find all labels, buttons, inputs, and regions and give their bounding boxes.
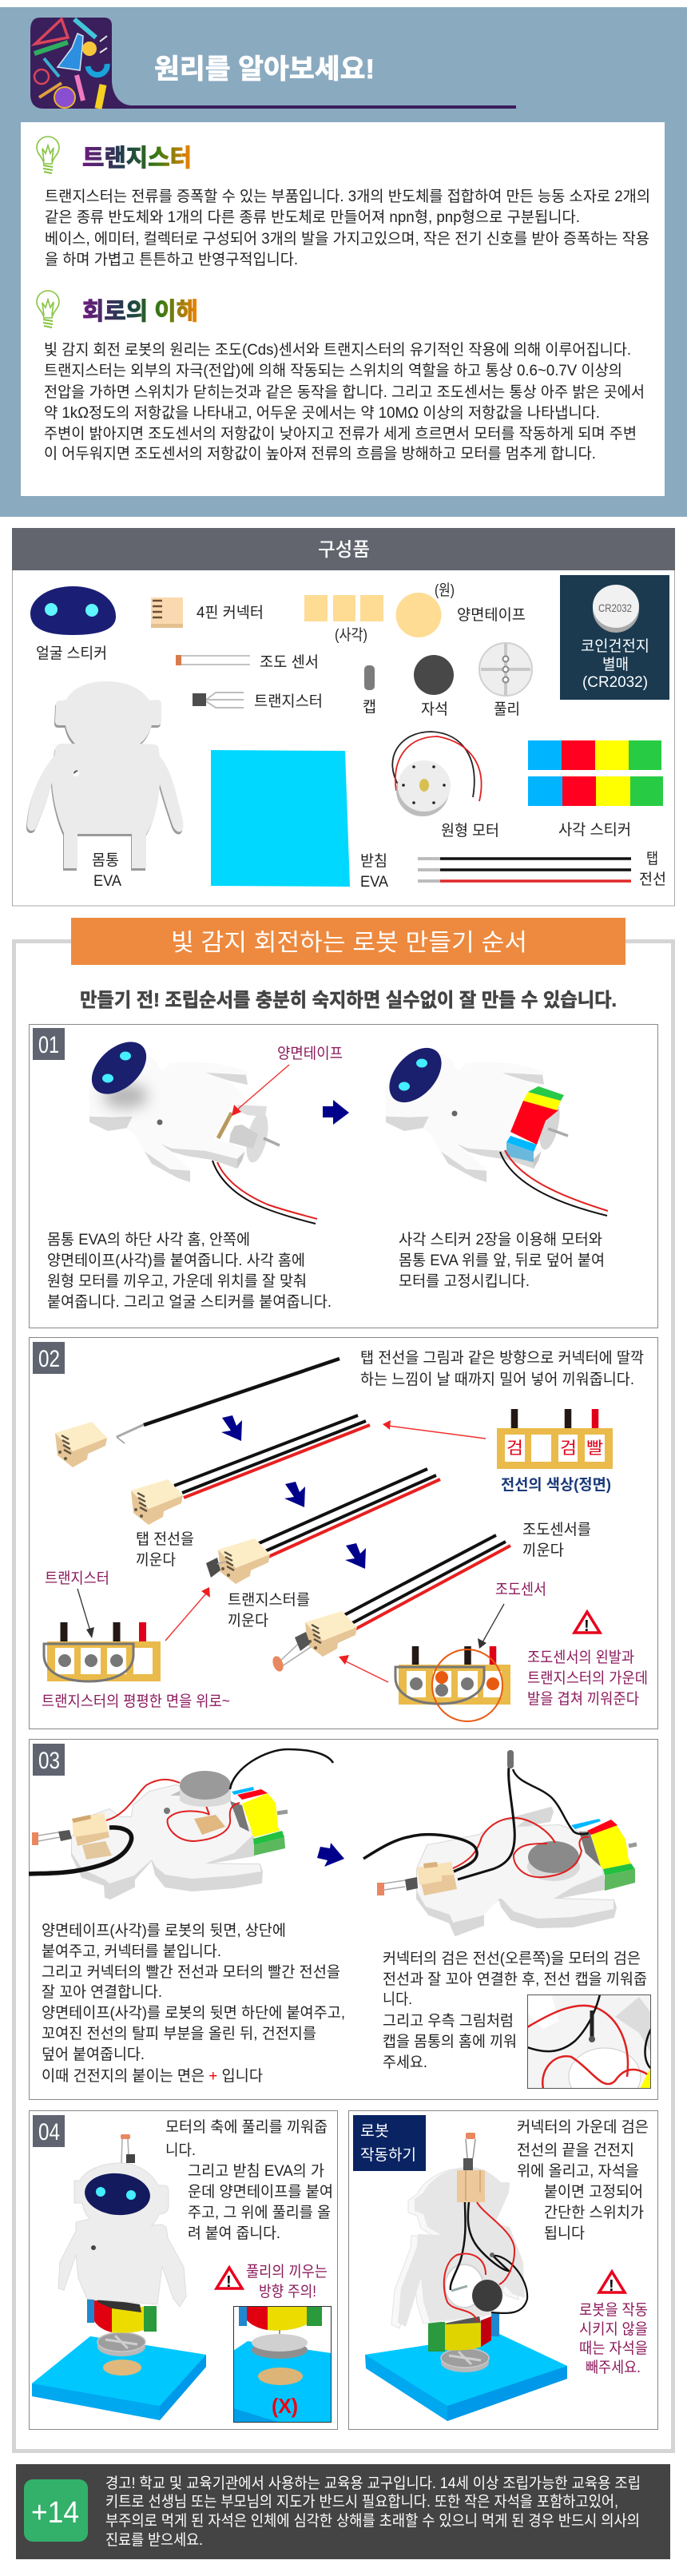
text block: step 01 right: 사각 스티커 2장을 이용해 모터와 [399, 1231, 602, 1248]
text block: step 03 left: 잘 꼬아 연결합니다. [42, 1983, 162, 2001]
component: coin battery box: (CR2032) [582, 674, 648, 691]
callout: light sensor placement: 조도센서 [495, 1581, 546, 1598]
text block: step 02 intro [360, 1349, 644, 1388]
icon: light bulb 2 [37, 291, 59, 327]
text block: step 04: 운데 양면테이프를 붙여 [188, 2183, 333, 2201]
text block: step 03 left: 붙여주고, 커넥터를 붙입니다. [42, 1943, 221, 1960]
text block: sensor warning [527, 1649, 648, 1708]
component: double sided tape [304, 581, 526, 644]
component: magnet [414, 655, 454, 718]
badge 03 [33, 1744, 65, 1776]
illustration: light sensor inserted [271, 1521, 591, 1673]
component: base EVA [211, 750, 388, 891]
component: 4-pin connector [151, 597, 264, 628]
text block: step 03 left: 꼬여진 전선의 탈피 부분을 올린 뒤, 건전지를 [42, 2025, 316, 2042]
callout: remove magnet: 때는 자석을 [579, 2340, 648, 2357]
component: transistor [193, 693, 323, 710]
illustration: tab wires inserted: 탭 전선을 [136, 1530, 194, 1548]
component: square stickers [528, 740, 663, 839]
text block: step 03 right: 그리고 우측 그림처럼 [383, 2012, 514, 2030]
text block: sensor warning: 발을 겹쳐 끼워준다 [527, 1690, 639, 1708]
text block: warning: 부주의로 먹게 된 자석은 인체에 심각한 상해를 초래할 수 있으니 먹게 된 경우 반드시 의사의 [105, 2512, 640, 2530]
component: face sticker: 얼굴 스티커 [36, 645, 107, 662]
component: double sided tape: (원) [435, 581, 455, 599]
icon: warning: ! [584, 1617, 590, 1635]
illustration: robot front on base [32, 2134, 206, 2420]
text block: step 01 left [47, 1231, 332, 1311]
text block: step 03 left: 덮어 붙여줍니다. [42, 2046, 145, 2063]
callout: pulley direction: 풀리의 끼우는 [246, 2263, 328, 2280]
panel: step 01 [29, 1024, 658, 1328]
text block: warning: 키트로 선생님 또는 부모님의 지도가 반드시 필요합니다. 또한 작은 자석을 포함하고있어, [105, 2493, 618, 2511]
text block: step 03 right [383, 1950, 647, 2071]
panel: explanation card [21, 122, 665, 496]
wire color legend: 검 [560, 1439, 577, 1458]
text block: step 03 right: 커넥터의 검은 전선(오른쪽)을 모터의 검은 [383, 1950, 641, 1967]
illustration: tab wires inserted [131, 1415, 370, 1569]
component: double sided tape: (사각) [335, 626, 367, 644]
component: body EVA [26, 681, 183, 890]
panel: principle section background [0, 7, 687, 517]
text block: step 01 right [399, 1231, 605, 1290]
text block: operation: 위에 올리고, 자석을 [517, 2162, 639, 2180]
icon: warning: ! [609, 2277, 614, 2295]
text block: circuit description: 약 1kΩ정도의 저항값을 나타내고, 어두운 곳에서는 약 10MΩ 이상의 저항값을 나타냅니다. [44, 404, 600, 422]
callout: pulley direction: 방향 주의! [259, 2283, 316, 2300]
component: transistor: 트랜지스터 [254, 693, 323, 710]
text block: transistor description: 같은 종류 반도체와 1개의 다른 종류 반도체로 만들어져 npn형, pnp형으로 구분됩니다. [45, 208, 580, 226]
badge 04: 04 [38, 2119, 60, 2145]
badge: operate robot [353, 2115, 426, 2171]
panel: robot operation [348, 2110, 658, 2430]
heading: circuit understanding: 회로의 이해 [82, 299, 198, 325]
badge 02: 02 [38, 1346, 60, 1372]
title: 원리를 알아보세요! [154, 54, 375, 85]
component: base EVA: 받침 [360, 852, 387, 870]
illustration: robot with stickers [379, 1038, 608, 1216]
badge 01 [33, 1028, 65, 1060]
badge: operate robot: 작동하기 [360, 2146, 416, 2164]
text block: sensor warning: 트랜지스터의 가운데 [527, 1669, 648, 1687]
component: body EVA: 몸통 [92, 852, 119, 869]
illustration: robot with tape and motor [82, 1032, 317, 1224]
component: coin battery box [560, 575, 669, 700]
wire color legend [497, 1409, 613, 1494]
text block: operation: 전선의 끝을 건전지 [517, 2141, 634, 2159]
text block: operation: 붙이면 고정되어 [544, 2183, 643, 2201]
panel: components [12, 528, 675, 906]
text block: transistor description: 을 하며 가볍고 튼튼하고 반영구적입니다. [45, 251, 298, 268]
text block: circuit description [44, 341, 645, 462]
text block: step 03 left: 이때 건전지의 붙이는 면은 + 입니다 [42, 2067, 263, 2085]
text block: step 03 left: 양면테이프(사각)를 로봇의 뒷면 하단에 붙여주고, [42, 2004, 345, 2022]
callout: remove magnet [579, 2301, 648, 2376]
age badge [24, 2479, 88, 2542]
text block: operation: 간단한 스위치가 [544, 2204, 644, 2221]
text block: step 04: 모터의 축에 풀리를 끼워줍 [165, 2118, 328, 2136]
text block: warning: 경고! 학교 및 교육기관에서 사용하는 교육용 교구입니다. 14세 이상 조립가능한 교육용 조립 [105, 2475, 641, 2492]
text block: operation: 커넥터의 가운데 검은 [517, 2118, 649, 2136]
icon: science tools header [30, 18, 516, 109]
component: light sensor: 조도 센서 [260, 653, 319, 671]
inset: wrong pulley direction [233, 2306, 332, 2423]
wire color legend: 전선의 색상(정면) [501, 1476, 611, 1494]
callout: transistor placement [42, 1570, 230, 1710]
callout: remove magnet: 빼주세요. [586, 2359, 641, 2376]
component: 4-pin connector: 4핀 커넥터 [197, 604, 264, 621]
component: round motor [392, 732, 499, 839]
illustration: tab wires inserted: 끼운다 [136, 1551, 176, 1569]
text block: transistor description: 트랜지스터는 전류를 증폭할 수 있는 부품입니다. 3개의 반도체를 접합하여 만든 능동 소자로 2개의 [45, 188, 650, 205]
component: coin battery box: 별매 [602, 656, 629, 673]
text block: step 02 intro: 탭 전선을 그림과 같은 방향으로 커넥터에 딸깍 [360, 1349, 644, 1367]
text block: step 04: 니다. [165, 2141, 196, 2159]
text block: circuit description: 이 어두워지면 조도센서의 저항값이 높아져 전류의 흐름을 방해하고 모터를 멈추게 합니다. [44, 445, 596, 462]
illustration: robot back on base [365, 2133, 567, 2421]
component: cap: 캡 [363, 698, 376, 716]
illustration: transistor inserted: 끼운다 [228, 1612, 268, 1629]
icon: warning [599, 2272, 625, 2295]
component: body EVA: EVA [93, 873, 121, 890]
icon: warning [216, 2268, 242, 2291]
text block: step 03 left [42, 1922, 345, 2085]
component: double sided tape: 양면테이프 [457, 606, 526, 624]
callout: transistor placement: 트랜지스터 [45, 1570, 109, 1587]
banner title: 빛 감지 회전하는 로봇 만들기 순서 [171, 930, 527, 956]
arrow: next [323, 1100, 349, 1125]
panel: step 04 [29, 2110, 337, 2430]
callout: double sided tape [232, 1045, 343, 1116]
text block: warning [105, 2475, 641, 2549]
panel: step 02 [29, 1337, 658, 1729]
text block: operation [517, 2118, 649, 2242]
component: pulley: 풀리 [494, 701, 520, 718]
text block: step 03 left: 양면테이프(사각)를 로봇의 뒷면, 상단에 [42, 1922, 286, 1939]
text block: step 03 right: 캡을 몸통의 홈에 끼워 [383, 2033, 517, 2050]
component: light sensor [176, 653, 319, 671]
inset: wrong pulley direction: (X) [272, 2394, 298, 2418]
component: tab wires: 탭 [646, 850, 658, 867]
badge 04 [33, 2115, 65, 2147]
arrow: down 1 [221, 1415, 242, 1441]
text block: warning: 진료를 받으세요. [105, 2531, 203, 2549]
text block: step 01 right: 몸통 EVA 위를 앞, 뒤로 덮어 붙여 [399, 1252, 605, 1269]
text block: step 01 left: 양면테이프(사각)를 붙여줍니다. 사각 홈에 [47, 1252, 305, 1269]
badge 02 [33, 1342, 65, 1374]
illustration: light sensor inserted: 끼운다 [522, 1542, 564, 1559]
text block: circuit description: 주변이 밝아지면 조도센서의 저항값이 낮아지고 전류가 세게 흐르면서 모터를 작동하게 되며 주변 [44, 425, 637, 443]
text block: transistor description [45, 188, 650, 268]
text block: circuit description: 전압을 가하면 스위치가 닫히는것과 같은 동작을 합니다. 그리고 조도센서는 통상 아주 밝은 곳에서 [44, 383, 645, 401]
text block: operation: 됩니다 [544, 2225, 585, 2242]
callout: double sided tape: 양면테이프 [277, 1045, 343, 1062]
text block: circuit description: 빛 감지 회전 로봇의 원리는 조도(Cds)센서와 트랜지스터의 유기적인 작용에 의해 이루어집니다. [44, 341, 631, 359]
badge 01: 01 [38, 1032, 59, 1058]
component: magnet: 자석 [421, 701, 448, 718]
heading: transistor: 트랜지스터 [82, 145, 192, 172]
panel: step 03 [29, 1740, 658, 2106]
icon: warning [574, 1612, 600, 1635]
heading: components: 구성품 [318, 539, 370, 561]
callout: pulley direction [246, 2263, 328, 2300]
text block: step 03 right: 전선과 잘 꼬아 연결한 후, 전선 캡을 끼워줍 [383, 1971, 647, 1988]
icon: warning: ! [226, 2273, 232, 2291]
icon: light bulb 1 [37, 137, 59, 173]
illustration: transistor inserted [206, 1469, 440, 1629]
callout: remove magnet: 로봇을 작동 [579, 2301, 648, 2319]
component: square stickers: 사각 스티커 [558, 821, 631, 839]
component: round motor: 원형 모터 [441, 822, 499, 839]
component: base EVA: EVA [360, 874, 388, 891]
component: cap [363, 665, 376, 716]
badge 03: 03 [38, 1748, 60, 1774]
illustration: transistor inserted: 트랜지스터를 [228, 1591, 310, 1609]
component: coin battery box: 코인건전지 [581, 637, 649, 655]
illustration: robot back with battery and cap [363, 1750, 637, 1935]
subheading: 만들기 전! 조립순서를 충분히 숙지하면 실수없이 잘 만들 수 있습니다. [80, 990, 617, 1011]
wire color legend: 빨 [586, 1439, 603, 1458]
arrow: sensor legend to connector [339, 1655, 388, 1682]
age badge: +14 [31, 2496, 79, 2530]
text block: step 02 intro: 하는 느낌이 날 때까지 밀어 넣어 끼워줍니다. [360, 1371, 634, 1388]
arrow: transistor legend to connector [165, 1587, 210, 1641]
component: tab wires: 전선 [639, 871, 666, 888]
badge: operate robot: 로봇 [360, 2123, 389, 2140]
component: face sticker [30, 586, 116, 662]
text block: step 03 right: 니다. [383, 1991, 412, 2008]
component: pulley [479, 643, 532, 718]
callout: transistor placement: 트랜지스터의 평평한 면을 위로~ [42, 1693, 230, 1710]
text block: step 01 right: 모터를 고정시킵니다. [399, 1272, 530, 1290]
text block: step 01 left: 원형 모터를 끼우고, 가운데 위치를 잘 맞춰 [47, 1272, 307, 1290]
arrow: next [317, 1843, 344, 1867]
text block: step 04: 려 붙여 줍니다. [188, 2225, 280, 2242]
callout: light sensor placement [395, 1581, 546, 1721]
component: coin battery box: CR2032 [598, 601, 632, 614]
illustration: connector and single wire [55, 1359, 340, 1467]
text block: step 03 right: 주세요. [383, 2054, 427, 2071]
arrow: legend to wires [383, 1420, 486, 1439]
callout: remove magnet: 시키지 않을 [579, 2320, 648, 2338]
illustration: robot back with magnet and connector [29, 1749, 333, 1899]
text block: step 04 [165, 2118, 333, 2242]
arrow: down 3 [345, 1543, 366, 1569]
arrow: down 2 [284, 1482, 305, 1507]
text block: transistor description: 베이스, 에미터, 컬렉터로 구성되어 3개의 발을 가지고있으며, 작은 전기 신호를 받아 증폭하는 작용 [45, 230, 649, 248]
inset: cap in hole detail [527, 1995, 651, 2106]
text block: circuit description: 트랜지스터는 외부의 자극(전압)에 의해 작동되는 스위치의 역할을 하고 통상 0.6~0.7V 이상의 [44, 362, 622, 379]
illustration: light sensor inserted: 조도센서를 [522, 1521, 591, 1538]
component: tab wires [418, 850, 666, 888]
text block: step 01 left: 몸통 EVA의 하단 사각 홈, 안쪽에 [47, 1231, 250, 1248]
text block: step 04: 주고, 그 위에 풀리를 올 [188, 2204, 331, 2221]
text block: sensor warning: 조도센서의 왼발과 [527, 1649, 634, 1666]
panel: assembly steps frame [14, 918, 673, 2451]
panel: safety warning [16, 2464, 670, 2559]
wire color legend: 검 [506, 1439, 523, 1458]
text block: step 01 left: 붙여줍니다. 그리고 얼굴 스티커를 붙여줍니다. [47, 1293, 332, 1311]
text block: step 03 left: 그리고 커넥터의 빨간 전선과 모터의 빨간 전선을 [42, 1963, 340, 1981]
banner title [71, 918, 625, 965]
text block: step 04: 그리고 받침 EVA의 가 [188, 2162, 324, 2180]
